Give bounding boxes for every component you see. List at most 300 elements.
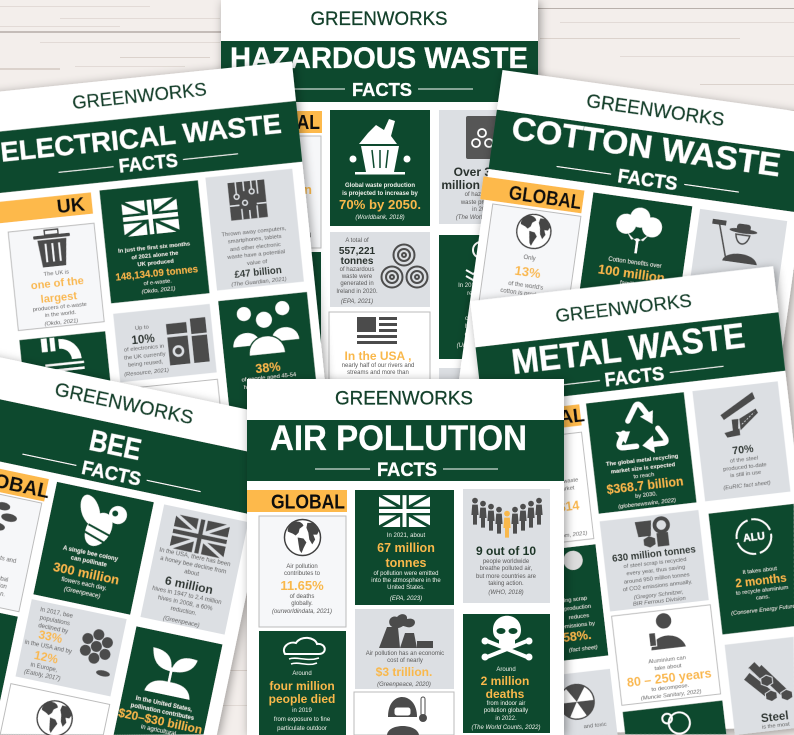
text block: Cotton benefits over — [608, 257, 662, 270]
text block: Only — [523, 255, 536, 262]
text block: pollination contributes — [130, 703, 195, 722]
text block: 557,221 — [339, 246, 376, 257]
text block: United States. — [387, 585, 425, 591]
text block: 70% — [732, 443, 755, 457]
text block: Air pollution has an economic — [366, 651, 444, 657]
icon: globe — [284, 519, 321, 556]
text block: hazardous — [465, 324, 493, 330]
text block — [336, 238, 378, 305]
card: green left — [0, 599, 18, 735]
text block: (Greenpeace) — [63, 587, 101, 600]
text block: around 950 million tonnes — [624, 572, 690, 586]
icon: thermometer — [419, 697, 427, 722]
text block: in 2021 — [472, 207, 493, 213]
tag: global — [221, 111, 322, 134]
card: 70% of steel — [692, 381, 790, 501]
text block: by 2030. — [635, 491, 658, 500]
card: 2 million deaths — [463, 614, 550, 733]
text block: 100 million — [597, 261, 666, 286]
text block — [29, 268, 89, 329]
text block: (The World Counts, 2022) — [471, 725, 541, 731]
text block: In 2017, bee — [39, 607, 74, 620]
text block: cost of nearly — [387, 658, 423, 664]
logo: GREENWORKS — [335, 388, 473, 410]
text block: of the steel — [730, 455, 758, 465]
icon: globe — [515, 212, 553, 251]
text block: (Greenpeace, 2020) — [377, 682, 431, 688]
poster: metal waste — [470, 266, 794, 735]
text block: in 2022. — [495, 716, 517, 722]
icon: partial gauge — [157, 395, 187, 425]
icon: smog cloud — [284, 638, 325, 664]
text block: (EPA, 2023) — [390, 596, 422, 602]
text block — [145, 547, 231, 633]
header band — [221, 41, 538, 102]
tag: global — [247, 490, 347, 514]
icon: person with mask — [387, 697, 419, 735]
text block: in Europe, — [30, 662, 58, 674]
text block: a honey bee decline from — [160, 556, 227, 576]
card: green right — [439, 235, 527, 359]
text block — [441, 165, 523, 221]
title: HAZARDOUS WASTE — [230, 42, 528, 75]
text block: in the USA and by — [24, 640, 72, 655]
subtitle: FACTS — [118, 150, 179, 178]
icon: steel beam — [718, 392, 760, 438]
icon: factory — [379, 614, 433, 648]
text block: (Okdo, 2021) — [141, 286, 176, 295]
text block — [596, 255, 667, 292]
text block: 148,134.09 tonnes — [115, 264, 199, 283]
text block: waste have a potential — [226, 249, 285, 261]
text block: 13% — [514, 263, 542, 281]
text block: The UK is — [43, 270, 69, 278]
text block: particulate outdoor — [277, 726, 327, 732]
text block — [366, 651, 444, 688]
title: AIR POLLUTION — [270, 419, 527, 458]
text block — [371, 533, 441, 602]
text block: Thrown away computers, — [221, 226, 287, 238]
card: metal market — [496, 432, 594, 548]
text block: to reach — [633, 472, 655, 481]
text block: 12% — [33, 648, 60, 667]
text block: can pollinate — [70, 555, 108, 569]
text block: $14 — [558, 498, 580, 515]
icon: honeycomb — [75, 626, 119, 678]
icon: crowd — [471, 498, 543, 538]
text block: and other electronic — [230, 242, 281, 253]
card: lower gray — [439, 368, 527, 408]
text block: contributes to — [284, 571, 321, 577]
card: in the USA — [329, 312, 430, 392]
text block: (Okdo, 2021) — [44, 318, 79, 328]
title: COTTON WASTE — [510, 110, 783, 183]
text block: smartphones, tablets — [228, 234, 282, 246]
text block: Steel — [760, 710, 789, 725]
text block — [272, 564, 332, 615]
text block: the UK currently — [124, 351, 166, 362]
text block: of the world's — [508, 281, 543, 292]
text block: tonnes — [386, 556, 427, 570]
icon: triple spiral — [382, 244, 428, 288]
text block: market — [557, 485, 575, 493]
text block: A total of — [345, 238, 369, 244]
text block: people worldwide — [483, 559, 530, 565]
card: 557,221 tonnes — [330, 232, 430, 307]
card: masked person — [354, 692, 454, 735]
text block: (EPA, 2021) — [341, 299, 373, 305]
tag: global: GLOBAL — [246, 112, 320, 134]
icon: farmer — [707, 219, 762, 265]
text block: In just the first six months — [118, 241, 190, 255]
logo: GREENWORKS — [53, 380, 195, 429]
logo: GREENWORKS — [554, 290, 693, 326]
text block: Over 300 — [454, 165, 505, 179]
icon: appliances — [166, 317, 210, 366]
text block: breathe polluted air, — [480, 566, 533, 572]
card: 100 million families — [577, 192, 692, 322]
text block: waste were — [341, 274, 373, 280]
text block: In the USA, there has been — [159, 547, 231, 568]
icon: US flag — [357, 317, 397, 344]
card: hidden white: (Statista, 2021) — [271, 233, 311, 239]
text block: reduction. — [170, 606, 197, 617]
text block: being reused, — [128, 359, 164, 369]
card: 11.65% — [259, 516, 346, 627]
header band — [489, 110, 794, 213]
text block — [0, 552, 17, 599]
text block: from exposure to fine — [274, 717, 331, 723]
text block: to recycle aluminium — [736, 585, 789, 597]
card: radiation — [524, 669, 618, 735]
tag: global: GLOBAL — [503, 405, 586, 435]
tag: global: GLOBAL — [271, 492, 345, 514]
tag: global — [480, 176, 585, 214]
text block: Global waste production — [345, 183, 415, 189]
text block: tonnes — [341, 256, 374, 267]
text block — [342, 349, 414, 376]
text block: 67 million — [377, 541, 435, 555]
text block — [49, 544, 124, 603]
card: scrap reduces emissions — [509, 544, 608, 665]
card: 33% 12% decline — [15, 599, 127, 696]
text block: largest — [40, 290, 78, 306]
text block — [726, 564, 794, 617]
text block: 300 million — [52, 559, 121, 588]
icon: bee — [67, 489, 130, 555]
card: 10% reused — [113, 304, 217, 382]
text block: to decompose. — [651, 683, 690, 693]
text block: £47 billion — [234, 265, 282, 281]
text block: families — [619, 280, 640, 289]
icon: skull and crossbones — [482, 616, 532, 660]
text block: (Muncie Sanitary, 2022) — [641, 689, 702, 702]
text block: 70% by 2050. — [339, 197, 421, 212]
text block — [457, 283, 501, 357]
text block: deaths — [486, 687, 525, 701]
text block: In 2021, about — [387, 533, 426, 539]
subtitle: FACTS — [352, 80, 412, 100]
text block: of hazardous — [340, 267, 374, 273]
text block: every year, thus saving — [626, 565, 686, 578]
text block: generated in — [340, 281, 374, 287]
text block: reduces — [568, 613, 590, 621]
text block: 11.65% — [280, 578, 324, 593]
icon: person drinking — [646, 611, 686, 651]
icon: globe — [34, 698, 75, 735]
icon: seedling — [144, 647, 198, 700]
card: one of the largest — [8, 223, 104, 331]
text block: In the United States, — [135, 696, 193, 714]
text block — [557, 595, 598, 655]
text block: of CO2 emissions annually. — [623, 579, 693, 594]
text block: into the atmosphere in the — [371, 578, 441, 584]
text block — [604, 454, 686, 512]
text block: (WHO, 2018) — [488, 590, 524, 596]
header band — [247, 420, 564, 481]
text block: is still in use — [730, 470, 762, 479]
text block: (statista.com, 2021) — [537, 530, 588, 542]
icon: overflowing bin — [350, 119, 410, 174]
text block: declined by — [38, 623, 69, 635]
poster: bee — [0, 348, 284, 735]
text block: of electronics in — [124, 344, 164, 354]
icon: map pin globe — [662, 711, 691, 735]
icon: UK flag — [169, 514, 230, 559]
text block: taking action. — [488, 581, 524, 587]
text block: $368.7 billion — [606, 475, 684, 497]
text block: (Resource, 2021) — [124, 368, 169, 378]
text block: but more countries are — [476, 574, 537, 580]
text block: 630 million tonnes — [612, 544, 696, 565]
text block: in 2019 — [292, 708, 313, 714]
text block — [221, 226, 292, 289]
card: $3 trillion — [355, 609, 454, 689]
card: steel — [725, 637, 794, 735]
text block: hives in 2008, a 60% — [157, 595, 214, 613]
card: 300 million flowers — [33, 482, 154, 615]
text block: A single bee colony — [62, 546, 119, 563]
text block: Up to — [135, 325, 149, 332]
text block: Using scrap — [557, 596, 588, 605]
text block: emissions by — [561, 621, 595, 631]
text block: value of — [247, 259, 268, 267]
card: hidden white: Over 1 billion — [262, 182, 312, 197]
text block: million tonnes — [441, 178, 523, 192]
icon: UK flag — [379, 495, 430, 527]
icon: flower — [0, 500, 20, 534]
text block: of pollution were emitted — [373, 571, 439, 577]
text block — [119, 323, 169, 378]
card: 6 million hives — [140, 504, 248, 635]
icon: group of people — [228, 299, 301, 358]
text block: In 2018, the UK — [458, 283, 500, 289]
text block: (globenewswire, 2022) — [618, 498, 676, 511]
card: green left — [233, 252, 321, 362]
text block: about — [184, 569, 200, 578]
logo: GREENWORKS — [585, 91, 726, 131]
text block: In the USA , — [345, 349, 411, 363]
text block: 33% — [37, 627, 64, 646]
text block — [499, 252, 554, 309]
text block: of deaths — [290, 594, 314, 600]
tag: global: GLOBAL — [507, 182, 583, 214]
header band — [0, 388, 275, 517]
tag: UK: UK — [56, 194, 86, 218]
text block: Around — [292, 671, 312, 677]
text block: produced to-date — [723, 462, 767, 473]
text block: globally. — [291, 601, 313, 607]
tag: UK — [0, 192, 93, 226]
text block — [719, 442, 771, 492]
text block — [240, 358, 298, 391]
text block: pollution globally — [484, 708, 528, 714]
text block: 10% — [131, 332, 156, 347]
card: white lower — [121, 379, 226, 476]
text block: of hazardous — [465, 192, 499, 198]
text block: is projected to increase by — [342, 191, 419, 197]
text block: (EuRIC fact sheet) — [723, 480, 771, 492]
text block: profile) — [469, 351, 488, 357]
text block: waste produced — [460, 200, 503, 206]
text block — [612, 544, 702, 610]
icon: UK flag — [121, 197, 180, 237]
card: 9 out of 10 — [463, 489, 550, 603]
card: 13% sustainable — [478, 204, 581, 323]
text block: It takes about — [742, 566, 778, 576]
text block: Air pollution — [286, 564, 318, 570]
poster: hazardous waste — [221, 0, 538, 440]
card: £47 billion — [205, 169, 304, 290]
text block — [113, 241, 200, 298]
text block: cans. — [756, 594, 771, 601]
text block: 58%. — [562, 628, 592, 645]
subtitle: FACTS — [604, 364, 666, 392]
logo: GREENWORKS — [71, 79, 208, 113]
icon: waste wave — [466, 242, 489, 280]
card: white lower — [0, 684, 110, 735]
icon: trash can — [32, 228, 73, 268]
text block: (United Kingdom — [457, 343, 501, 349]
card: 67 million tonnes — [355, 490, 454, 605]
text block: (The Guardian, 2021) — [231, 276, 287, 288]
card: 148,134.09 tonnes — [99, 180, 210, 303]
subtitle — [545, 357, 725, 398]
text block — [269, 671, 335, 732]
card: over 300 million tonnes — [439, 110, 527, 224]
text block: people died — [269, 692, 335, 706]
icon: biohazard barrel — [466, 116, 502, 159]
card: 38% — [218, 292, 320, 427]
card: 70% by 2050 — [330, 110, 430, 226]
icon: steel rods — [746, 661, 793, 705]
text block: and toxic — [583, 722, 607, 730]
text block: of e-waste. — [143, 278, 173, 287]
card: 65% farmer — [684, 209, 787, 337]
text block: of the total — [465, 316, 493, 322]
text block — [471, 667, 541, 731]
subtitle — [20, 445, 202, 503]
text block: 38% — [255, 360, 281, 376]
text block: 9 out of 10 — [476, 544, 536, 558]
text block: populations — [39, 615, 70, 627]
title: ELECTRICAL WASTE — [0, 108, 283, 168]
text block: one of the — [30, 275, 84, 292]
poster: cotton waste — [453, 69, 794, 441]
text block: The global metal recycling — [606, 454, 679, 468]
text block: metal waste — [547, 477, 579, 487]
header band — [476, 312, 785, 406]
subtitle — [555, 158, 740, 204]
text block: flowers each day. — [61, 577, 107, 592]
icon: sewage pipe — [41, 335, 85, 372]
title: METAL WASTE — [510, 317, 747, 382]
text block — [18, 605, 79, 684]
text block — [760, 710, 790, 731]
header band — [0, 101, 302, 195]
logo: GREENWORKS — [310, 9, 448, 30]
text block: (The World Counts) — [456, 215, 508, 221]
icon: scrap — [562, 550, 584, 571]
text block: (ourworldindata, 2021) — [272, 609, 332, 615]
card: green lower with pin — [623, 701, 726, 735]
card: hidden white — [233, 136, 321, 248]
text block: (Eatoly, 2017) — [23, 669, 61, 683]
icon: ALU recycle: ALU — [742, 530, 766, 545]
text block: Around — [496, 667, 516, 673]
icon: circuit board — [227, 179, 268, 221]
text block: of 2021 alone the — [131, 250, 179, 261]
text block: generated. — [465, 332, 494, 338]
icon: recycle triangle — [613, 402, 667, 457]
title: BEE — [86, 424, 144, 467]
text block: have never recycled — [244, 380, 296, 391]
text block: producers of e-waste — [33, 302, 87, 313]
text block: Ireland in 2020. — [336, 289, 378, 295]
icon: radiation — [558, 683, 596, 721]
text block: UK produced — [137, 259, 175, 268]
text block — [625, 652, 714, 704]
text block: (Greenpeace) — [162, 616, 200, 629]
text block: BIR Ferrous Division — [633, 596, 686, 608]
text block: 6 million — [164, 573, 214, 597]
text block: 2 million — [481, 674, 529, 688]
icon: nuts and cans — [635, 517, 670, 549]
text block — [530, 477, 588, 542]
text block: of steel scrap is recycled — [623, 557, 687, 570]
text block — [476, 544, 537, 596]
text block: production — [564, 604, 591, 613]
subtitle: FACTS — [80, 458, 143, 491]
text block: (Gregory Schnitzer, — [634, 589, 684, 601]
text block: sustainably — [508, 297, 539, 307]
text block: 2 months — [735, 572, 787, 590]
text block: recorded — [467, 291, 491, 297]
card: four million people — [259, 631, 346, 735]
text block: hives in 1947 to 2.4 million — [152, 586, 222, 606]
text block: in the world. — [45, 310, 77, 319]
text block: four million — [269, 679, 335, 693]
text block: (Worldbank, 2018) — [355, 215, 405, 221]
text block: 80 – 250 years — [626, 667, 712, 690]
subtitle: FACTS — [616, 166, 679, 195]
stat: 65% — [722, 271, 746, 286]
card: pollination $20-$30 billion — [114, 626, 223, 735]
text block: from indoor air — [487, 701, 525, 707]
poster: electrical waste — [0, 61, 334, 500]
text block: Aluminium can — [648, 655, 686, 665]
text block — [116, 693, 206, 735]
